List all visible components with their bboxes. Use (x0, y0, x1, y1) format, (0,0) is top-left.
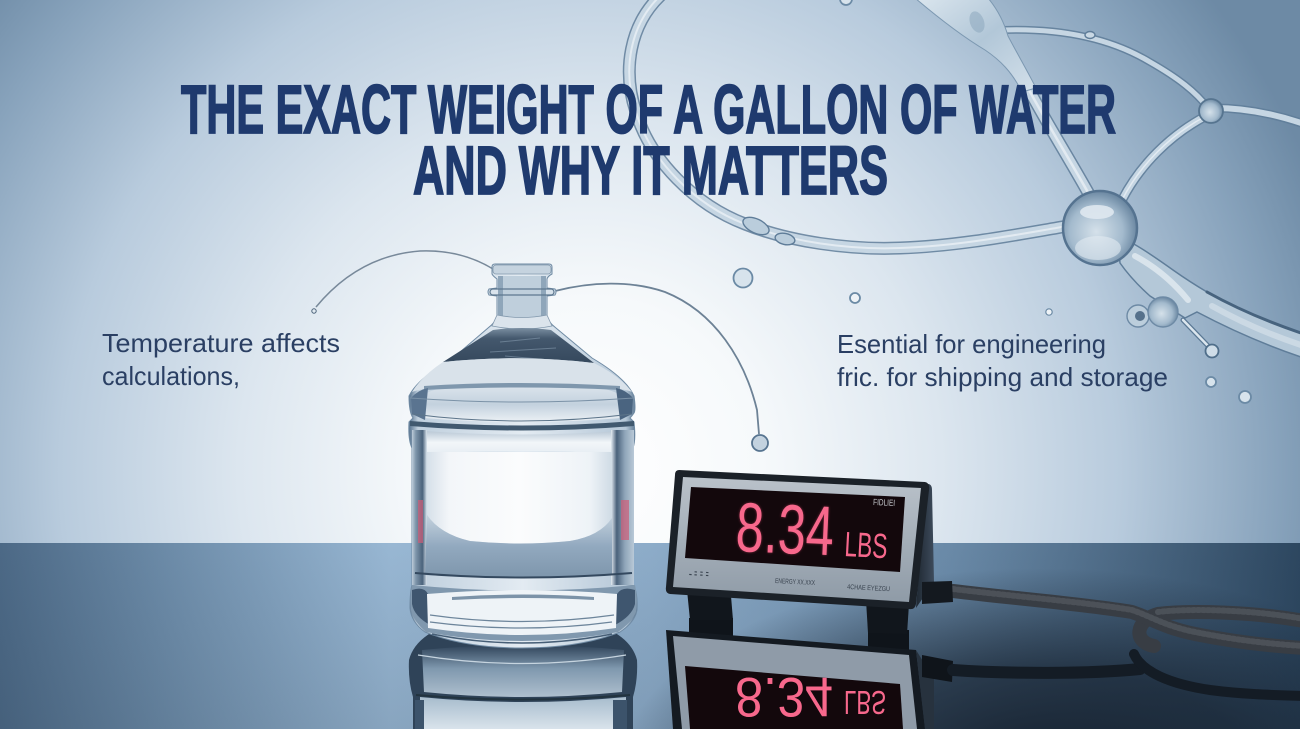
left text: calculations, (102, 361, 240, 391)
silhouette (409, 264, 637, 648)
body walls (412, 430, 427, 585)
neck shading (498, 276, 546, 318)
tube outlines (629, 0, 1300, 248)
small labels: FIDLIEI (873, 497, 895, 508)
left text (102, 328, 340, 391)
bottle reflection (409, 623, 637, 729)
scale reflection (666, 618, 953, 729)
water bottle (409, 264, 637, 648)
digital scale display: .::: (688, 568, 710, 578)
readout glow: 8.34 (734, 488, 836, 570)
cable reflection (953, 654, 1300, 696)
bezel (673, 477, 921, 602)
readout: LBS (844, 525, 889, 566)
floating bubbles (734, 0, 1251, 403)
background wall (0, 0, 1300, 544)
dark water cone (443, 328, 594, 363)
table surface (0, 543, 1300, 729)
water molecule network (629, 0, 1300, 358)
title (181, 71, 1116, 209)
readout: 8.34 (734, 488, 836, 570)
right text (837, 329, 1168, 392)
right text: Esential for engineering (837, 329, 1106, 359)
left text: Temperature affects (102, 328, 340, 358)
connector (922, 581, 953, 604)
white panel (427, 452, 612, 544)
small node (1199, 99, 1223, 123)
red reflections (418, 500, 423, 543)
digital scale display: 4CHAE EYEZGU (847, 584, 890, 593)
reflected readout: LBS (844, 684, 886, 721)
reflected readout: 8.34 (735, 666, 833, 729)
base (411, 585, 637, 641)
tube highlights (629, 0, 1206, 248)
outer case (666, 470, 929, 609)
title: AND WHY IT MATTERS (413, 132, 888, 209)
right callout line (555, 284, 768, 451)
digital scale display: ENERGY XX.XXX (775, 578, 815, 587)
side (916, 484, 934, 608)
upper wedge (915, 0, 1036, 92)
left callout line (312, 251, 493, 313)
right text: fric. for shipping and storage (837, 362, 1168, 392)
ring beads (740, 32, 1095, 246)
lower thick tube (1120, 243, 1300, 358)
large node (1063, 191, 1137, 265)
droplet cluster (1183, 320, 1212, 350)
lower water (425, 515, 612, 578)
screen (685, 487, 905, 572)
digital scale display (666, 470, 953, 634)
tube interiors (629, 0, 1300, 248)
feet (687, 590, 733, 620)
shoulder (412, 358, 632, 392)
groove band (410, 421, 634, 430)
cable (953, 589, 1300, 648)
